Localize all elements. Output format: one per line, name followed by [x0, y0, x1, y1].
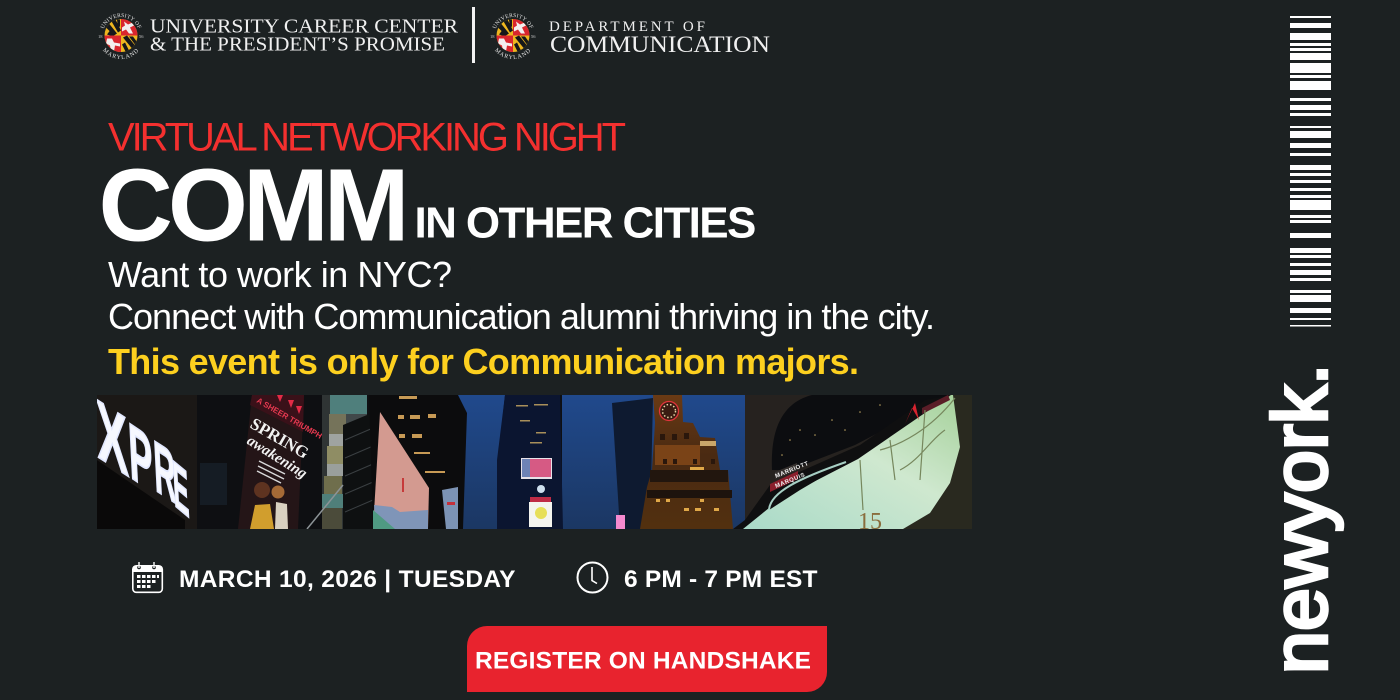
icon: university seal right	[490, 13, 536, 60]
icon: university seal left	[98, 13, 144, 60]
marriott building	[733, 395, 972, 535]
icon: university seal right: 18	[490, 34, 495, 39]
heading: virtual networking night: VIRTUAL NETWORKING NIGHT	[108, 116, 626, 160]
text: university career center	[150, 16, 458, 56]
icon: clock	[578, 562, 608, 592]
navy building with screens	[497, 395, 563, 529]
photo: times square night	[97, 395, 972, 529]
title: comm: COMM	[98, 148, 405, 262]
text: time: 6 PM - 7 PM EST	[624, 566, 818, 593]
text: department of communication: COMMUNICATION	[550, 32, 770, 57]
button: register	[467, 626, 827, 692]
barcode	[1290, 16, 1331, 326]
divider	[472, 7, 475, 63]
marriott building: MARRIOTT	[775, 461, 810, 480]
icon: university seal left: UNIVERSITY OF	[100, 13, 142, 28]
left sign	[97, 395, 227, 529]
title: new york vertical: newyork.	[1258, 363, 1344, 674]
spring awakening poster: SPRING	[247, 414, 312, 463]
marriott building: 15	[858, 509, 882, 535]
text: department of communication	[549, 19, 770, 57]
text: date: MARCH 10, 2026 | TUESDAY	[179, 566, 516, 593]
event date	[133, 562, 516, 593]
icon: university seal right: UNIVERSITY OF	[492, 13, 534, 28]
spring awakening poster	[238, 395, 324, 529]
left sign: R	[152, 426, 178, 521]
text: description: Connect with Communication alumni thriving in the city.	[108, 296, 935, 337]
sky	[458, 395, 505, 529]
event time	[578, 562, 818, 593]
left sign: P	[126, 405, 155, 510]
spring awakening poster: awakening	[244, 433, 310, 482]
dark towers with lit windows	[370, 396, 458, 529]
button: register: REGISTER ON HANDSHAKE	[475, 648, 811, 674]
icon: calendar	[133, 562, 162, 592]
icon: university seal right: 56	[531, 34, 536, 39]
text: description: Want to work in NYC?	[108, 254, 452, 295]
pink billboard	[373, 412, 429, 529]
text: description	[108, 254, 935, 337]
icon: university seal left: 56	[139, 34, 144, 39]
header logos	[98, 7, 770, 63]
text: department of communication: DEPARTMENT OF	[549, 19, 705, 35]
left sign: E	[171, 445, 191, 532]
text: eligibility note: This event is only for Communication majors.	[108, 341, 859, 382]
left sign: X	[94, 381, 130, 496]
spring awakening poster: A SHEER TRIUMPH	[255, 396, 324, 441]
title: in other cities: IN OTHER CITIES	[414, 198, 755, 248]
icon: university seal left: 18	[98, 34, 103, 39]
icon: university seal right: MARYLAND	[494, 48, 530, 60]
marriott building: MARQUIS	[775, 472, 806, 490]
clock tower	[612, 395, 733, 529]
text: university career center: & THE PRESIDENT’S PROMISE	[150, 34, 445, 56]
window building	[307, 395, 378, 529]
text: university career center: UNIVERSITY CAREER CENTER	[150, 16, 458, 38]
icon: university seal left: MARYLAND	[102, 48, 138, 60]
